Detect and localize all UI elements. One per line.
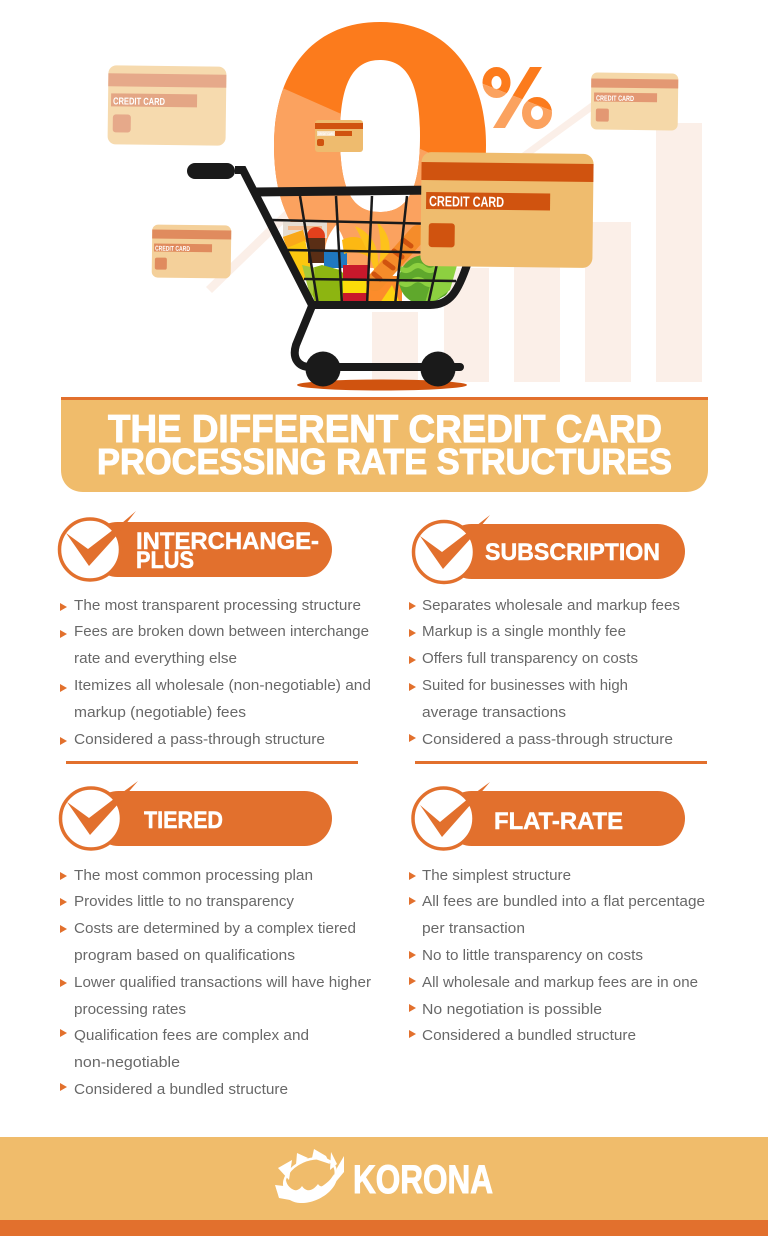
bullet list: flat-rate: No to little transparency on costs <box>422 947 643 964</box>
bullet list: flat-rate: The simplest structure <box>422 867 571 884</box>
bullet list: interchange-plus: Considered a pass-through structure <box>74 731 325 748</box>
credit card: top left <box>108 65 226 146</box>
badge: tiered <box>60 781 332 849</box>
credit card: large front <box>420 152 594 268</box>
background bar chart <box>206 96 702 382</box>
credit card: large front: CREDIT CARD <box>429 194 504 211</box>
bullet list: flat-rate <box>409 867 705 1044</box>
title banner <box>61 397 708 492</box>
cart contents <box>283 222 458 306</box>
bullet list: interchange-plus: Fees are broken down between interchange <box>74 623 369 640</box>
bullet list: tiered: Costs are determined by a complex tiered <box>74 920 356 937</box>
bullet list: tiered: non-negotiable <box>74 1054 180 1071</box>
bullet list: tiered: Qualification fees are complex and <box>74 1027 309 1044</box>
credit card: top left: CREDIT CARD <box>113 96 165 108</box>
footer band <box>0 1137 768 1236</box>
badge: interchange-plus: PLUS <box>136 547 194 574</box>
section: tiered <box>60 781 371 1098</box>
credit card: small centre: CREDIT CARD <box>318 132 334 136</box>
badge: interchange-plus: INTERCHANGE- <box>136 528 319 555</box>
bullet list: interchange-plus <box>60 597 371 748</box>
credit card: top right: CREDIT CARD <box>596 94 635 103</box>
credit card: lower left <box>152 225 231 278</box>
bullet list: tiered: The most common processing plan <box>74 867 313 884</box>
badge: interchange-plus <box>60 511 332 580</box>
bullet list: subscription: Suited for businesses with high <box>422 677 628 694</box>
section: subscription <box>409 515 685 748</box>
bullet list: flat-rate: All fees are bundled into a flat percentage <box>422 893 705 910</box>
cart shadow <box>297 380 467 390</box>
badge: flat-rate: FLAT-RATE <box>494 808 623 835</box>
bullet list: subscription: Separates wholesale and markup fees <box>422 597 680 614</box>
percent sign <box>487 67 548 128</box>
bullet list: flat-rate: per transaction <box>422 920 525 937</box>
bullet list: subscription <box>409 597 680 748</box>
badge: tiered: TIERED <box>144 807 223 834</box>
logo wordmark: KORONA <box>353 1158 493 1202</box>
bullet list: flat-rate: No negotiation is possible <box>422 1001 602 1018</box>
bullet list: flat-rate: Considered a bundled structure <box>422 1027 636 1044</box>
bullet list: subscription: average transactions <box>422 704 566 721</box>
section: flat-rate <box>409 782 705 1044</box>
big zero <box>274 22 486 268</box>
cart wheels <box>306 352 340 386</box>
bullet list: subscription: Offers full transparency on costs <box>422 650 638 667</box>
bullet list: tiered: Lower qualified transactions will have higher <box>74 974 371 991</box>
bullet list: interchange-plus: markup (negotiable) fees <box>74 704 246 721</box>
bullet list: interchange-plus: Itemizes all wholesale (non-negotiable) and <box>74 677 371 694</box>
title banner: PROCESSING RATE STRUCTURES <box>97 441 672 482</box>
badge: flat-rate <box>413 782 685 849</box>
bullet list: tiered: program based on qualifications <box>74 947 295 964</box>
credit card: lower left: CREDIT CARD <box>155 246 190 253</box>
cart wire grid <box>235 170 468 367</box>
bullet list: subscription: Markup is a single monthly fee <box>422 623 626 640</box>
bullet list: interchange-plus: rate and everything else <box>74 650 237 667</box>
title banner: THE DIFFERENT CREDIT CARD <box>108 408 662 451</box>
bullet list: tiered: processing rates <box>74 1001 186 1018</box>
shopping cart <box>187 163 468 390</box>
cart frame <box>235 170 468 305</box>
badge: subscription: SUBSCRIPTION <box>485 539 660 566</box>
bullet list: interchange-plus: The most transparent processing structure <box>74 597 361 614</box>
bullet list: subscription: Considered a pass-through structure <box>422 731 673 748</box>
bullet list: tiered: Considered a bundled structure <box>74 1081 288 1098</box>
credit card: small centre <box>315 120 363 152</box>
bullet list: flat-rate: All wholesale and markup fees are in one <box>422 974 698 991</box>
section: interchange-plus <box>60 511 371 748</box>
bullet list: tiered <box>60 867 371 1098</box>
credit card: top right <box>591 72 678 131</box>
icon: korona logo <box>275 1149 344 1205</box>
badge: subscription <box>414 515 685 582</box>
bullet list: tiered: Provides little to no transparency <box>74 893 294 910</box>
